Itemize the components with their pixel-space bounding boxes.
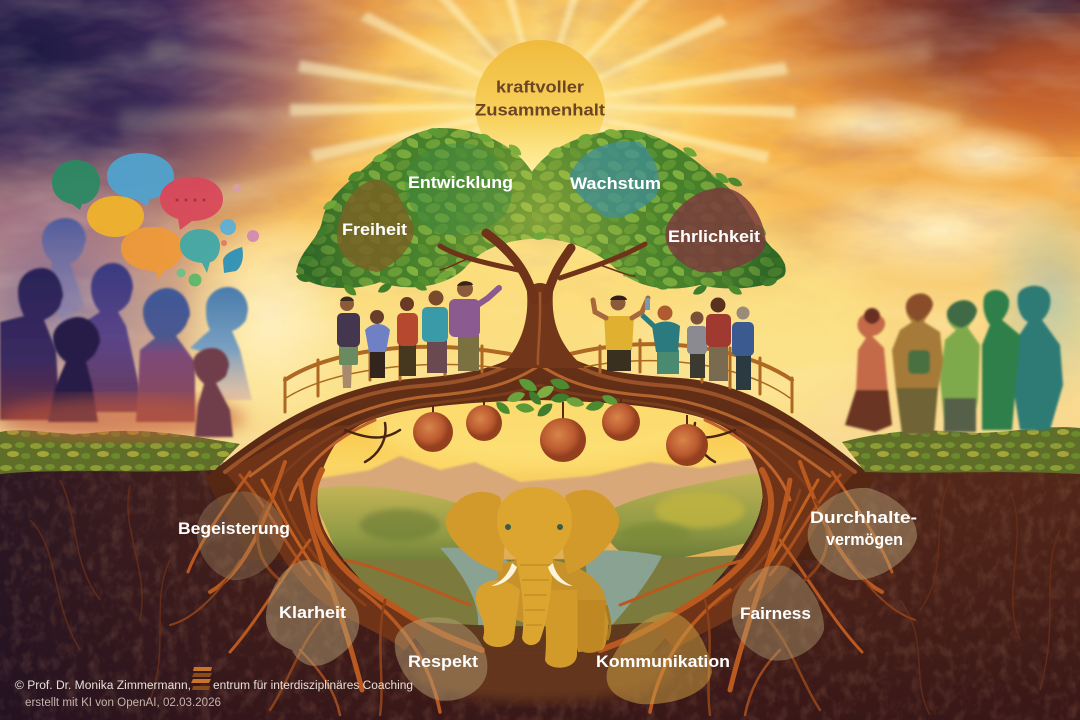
soil patch below elephant [410, 642, 670, 702]
underground roots left [170, 462, 482, 715]
label: Durchhaltevermögen [810, 509, 917, 549]
underground roots right [600, 462, 915, 715]
green hills left [317, 486, 460, 560]
small dark silhouette [48, 317, 100, 422]
bridge railing [285, 340, 792, 412]
tree trunk and branches [440, 233, 645, 368]
back blue silhouette [42, 218, 86, 325]
footer credit [15, 667, 413, 709]
label: Respekt: Respekt [408, 653, 479, 671]
orange man [892, 294, 943, 390]
person 3 [397, 297, 418, 376]
people on right bridge [593, 296, 754, 390]
person 7 [642, 298, 680, 374]
canopy patch: Entwicklung [405, 143, 513, 235]
left silhouettes [0, 153, 259, 440]
icon: Z logo [191, 667, 212, 690]
main root band [205, 340, 875, 560]
person 8 [687, 312, 707, 378]
silhouette 4 [190, 287, 252, 400]
green bag [908, 350, 930, 374]
root strands [225, 345, 855, 605]
person 6 [593, 296, 648, 371]
canopy patch: Wachstum [570, 141, 661, 218]
teal man [1012, 286, 1063, 430]
footer credit: entrum für interdisziplinäres Coaching [213, 680, 413, 692]
river [440, 548, 509, 625]
root blob: Fairness [732, 565, 824, 661]
root mass left [225, 425, 425, 650]
silhouette 3 [136, 288, 195, 422]
orange man head [906, 294, 933, 322]
dark silhouette 1 [0, 268, 63, 420]
lower bank [346, 555, 736, 626]
soil ground [0, 462, 1080, 720]
people on left bridge [337, 281, 499, 388]
person 5 [449, 281, 499, 371]
right silhouettes [845, 286, 1063, 434]
elephant legs [476, 580, 520, 647]
label: Kommunikation: Kommunikation [596, 653, 730, 671]
orange mist at ground left [0, 396, 245, 440]
root blob: Respekt [395, 617, 487, 701]
root blob: Klarheit [266, 560, 359, 666]
sun label [475, 78, 606, 120]
root blob: Begeisterung [178, 491, 290, 580]
person 10 [732, 306, 754, 390]
canopy patch: Freiheit [337, 180, 414, 272]
sun rays [120, 0, 960, 212]
silhouette 2 [60, 263, 140, 412]
canopy patch: Ehrlichkeit [665, 188, 766, 272]
tree canopy [295, 127, 787, 298]
sun label: Zusammenhalt [475, 102, 606, 120]
elephant ears [446, 492, 505, 572]
green hills right [610, 472, 762, 558]
green man [940, 300, 980, 430]
child silhouette [193, 348, 233, 437]
label: Entwicklung: Entwicklung [408, 174, 513, 192]
label: Fairness: Fairness [740, 605, 811, 623]
label: Durchhaltevermögen: Durchhalte- [810, 509, 917, 527]
apples [413, 398, 708, 466]
elephant head and trunk [497, 487, 572, 645]
label: Ehrlichkeit: Ehrlichkeit [668, 228, 761, 246]
bubble dots [176, 198, 206, 202]
root blob: Durchhaltevermögen [808, 488, 917, 580]
edge leaves [295, 127, 787, 298]
label: Klarheit: Klarheit [279, 604, 347, 622]
dark green man [982, 290, 1020, 430]
elephant body [490, 558, 608, 652]
plants left bank [0, 430, 240, 474]
person 4 [422, 290, 448, 373]
woman [856, 313, 888, 392]
label: Durchhaltevermögen: vermögen [826, 531, 903, 549]
landscape vista under the roots [317, 400, 762, 655]
orange man trousers [896, 388, 938, 434]
elephant tusks [491, 563, 517, 586]
person 2 [365, 310, 390, 378]
plants right bank [842, 427, 1080, 474]
green man head [947, 300, 977, 328]
root mass right [655, 425, 855, 650]
label: Wachstum: Wachstum [570, 175, 661, 193]
person 9 [706, 298, 731, 381]
label: Freiheit: Freiheit [342, 221, 408, 239]
trunk wrinkles [520, 565, 550, 625]
green man lower [944, 398, 976, 432]
background: sunset sky [0, 0, 1080, 520]
hanging leaves below trunk [494, 376, 620, 420]
root arch [170, 340, 915, 715]
fine soil roots [30, 480, 1060, 715]
person 1 [337, 296, 360, 388]
woman hair [864, 308, 880, 324]
sun [475, 40, 606, 170]
label: Begeisterung: Begeisterung [178, 520, 290, 538]
footer credit: erstellt mit KI von OpenAI, 02.03.2026 [25, 697, 221, 709]
woman skirt [845, 390, 892, 432]
footer credit: © Prof. Dr. Monika Zimmermann, [15, 680, 191, 692]
mountains [310, 455, 770, 520]
root blob: Kommunikation [596, 612, 730, 704]
elephant eyes [505, 524, 511, 530]
speech bubbles [52, 153, 259, 286]
elephant [446, 487, 619, 668]
sun label: kraftvoller [496, 78, 585, 96]
